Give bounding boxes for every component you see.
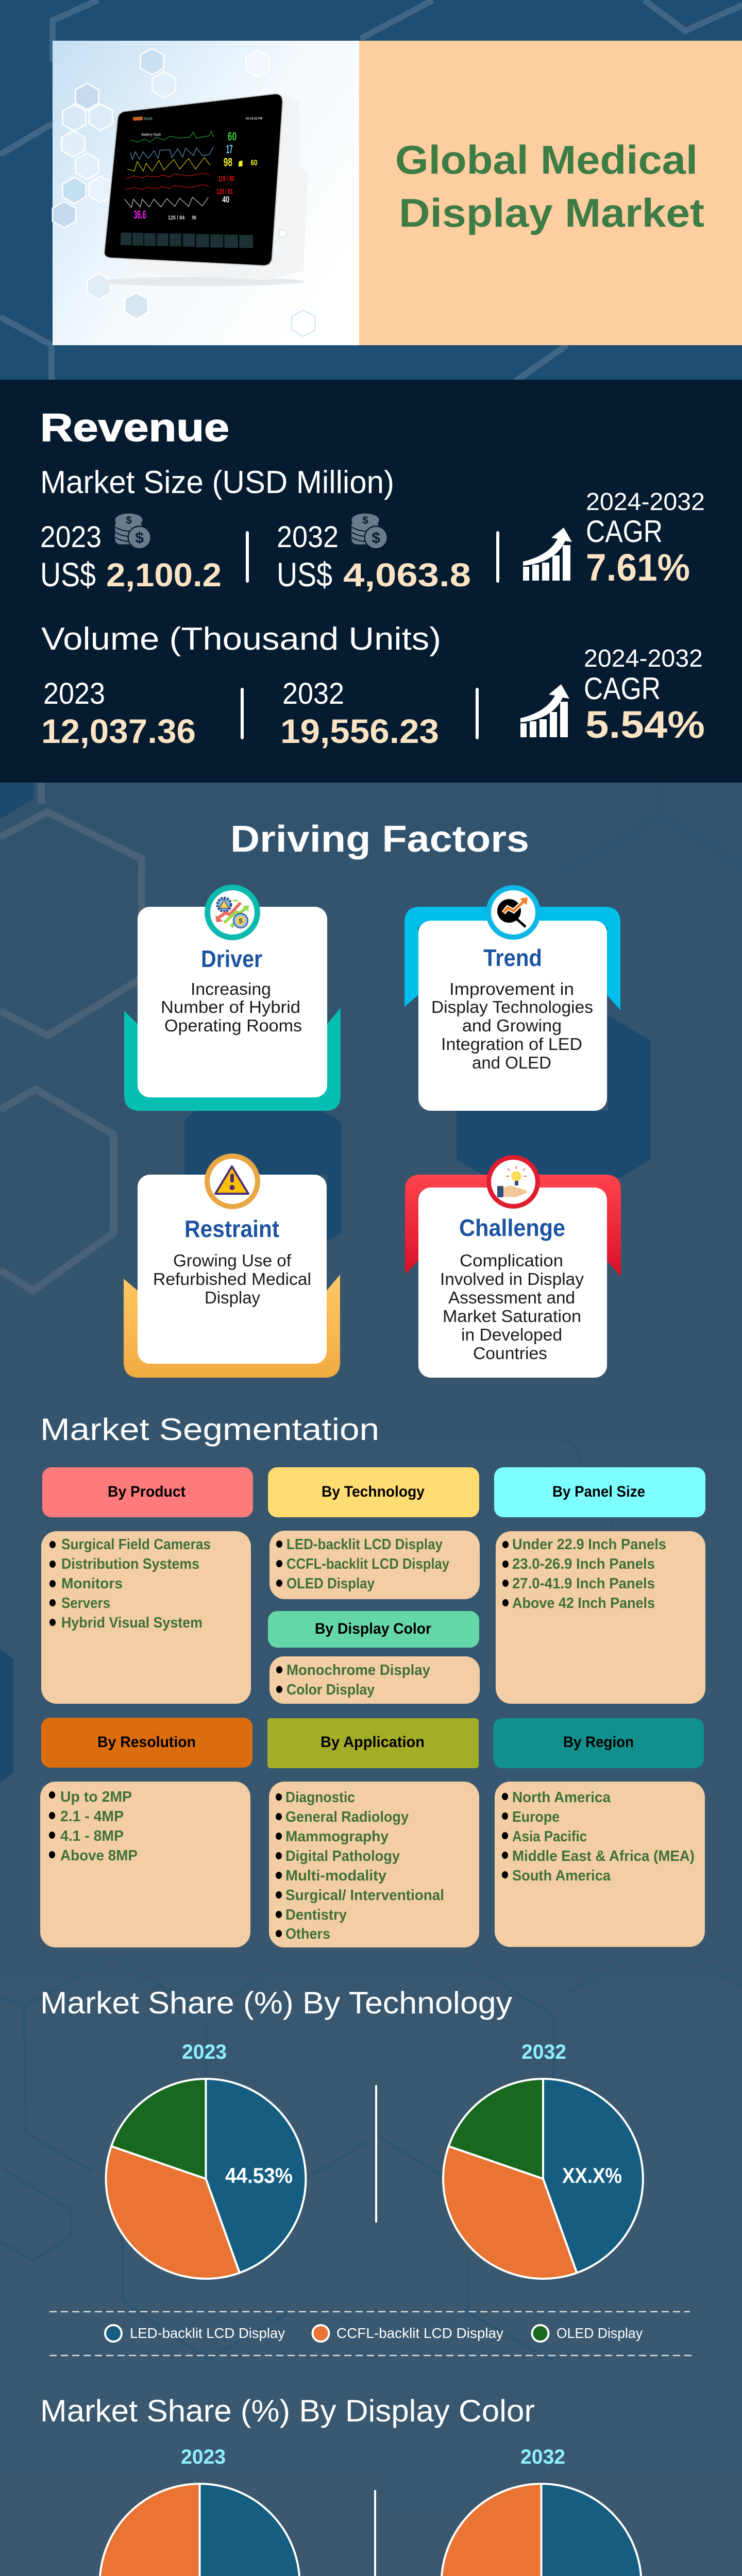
screen readings: 40 — [222, 194, 229, 205]
challenge text: Involved in Display — [440, 1269, 584, 1289]
revenue CAGR — [586, 488, 705, 589]
panel: driver — [124, 885, 341, 1111]
panel: by region — [493, 1718, 705, 1947]
divider — [374, 2490, 376, 2576]
2032 market size: 2032 — [277, 520, 339, 554]
driver text — [161, 979, 302, 1035]
region list: North America — [512, 1789, 611, 1806]
panel: challenge — [405, 1155, 621, 1378]
challenge text: in Developed — [461, 1325, 562, 1344]
resolution list — [49, 1789, 138, 1864]
panel: by technology: By Technology — [322, 1483, 425, 1500]
trend text: and OLED — [472, 1053, 551, 1072]
panel: by technology — [268, 1467, 480, 1599]
panel: by application: By Application — [321, 1734, 425, 1751]
chart: display color 2023: 2023 — [181, 2446, 226, 2468]
restraint text: Growing Use of — [173, 1251, 292, 1270]
region list: Asia Pacific — [512, 1828, 587, 1845]
legend: technology: CCFL-backlit LCD Display — [336, 2325, 503, 2341]
panel: by panel size — [494, 1467, 705, 1704]
divider — [241, 688, 244, 739]
chart: display color 2023 — [100, 2446, 300, 2576]
technology list: CCFL-backlit LCD Display — [286, 1556, 449, 1572]
panel: by resolution — [40, 1718, 252, 1947]
hero panel — [53, 41, 742, 345]
region list: Middle East & Africa (MEA) — [512, 1848, 695, 1865]
region list: Europe — [512, 1809, 560, 1825]
icon: coins 2032 — [351, 514, 387, 549]
trend text: Display Technologies — [431, 997, 593, 1016]
market size heading: Market Size (USD Million) — [40, 465, 394, 500]
application list: General Radiology — [285, 1809, 409, 1825]
icon: coins 2023: $ — [135, 530, 144, 547]
2023 volume: 12,037.36 — [41, 712, 196, 750]
restraint text: Display — [205, 1288, 260, 1307]
2032 volume — [280, 677, 439, 750]
chart: display color 2032 — [442, 2446, 642, 2576]
technology list — [276, 1536, 449, 1592]
trend text: and Growing — [462, 1016, 562, 1035]
revenue panel — [0, 380, 742, 783]
product list: Hybrid Visual System — [61, 1615, 203, 1631]
icon: coins 2032: $ — [372, 530, 380, 547]
panel: by display color — [268, 1611, 480, 1704]
panel: by display color: By Display Color — [315, 1620, 431, 1637]
screen readings — [133, 116, 263, 222]
resolution list: 2.1 - 4MP — [60, 1808, 124, 1825]
screen readings: 119 / 80 — [218, 175, 234, 183]
legend: technology: OLED Display — [556, 2325, 643, 2341]
screen readings: 125 / 84 — [168, 215, 185, 221]
resolution list: 4.1 - 8MP — [60, 1828, 124, 1844]
icon: trend — [486, 885, 541, 940]
display color list: Color Display — [286, 1682, 375, 1698]
application list: Dentistry — [285, 1907, 347, 1923]
icon: driver: $ — [239, 917, 243, 925]
monitor body — [127, 93, 308, 280]
product list: Monitors — [61, 1575, 123, 1592]
volume CAGR: 2024-2032 — [584, 645, 703, 672]
screen readings: S12A — [143, 116, 153, 121]
chart: technology 2032 — [443, 2041, 643, 2279]
region list — [502, 1789, 695, 1884]
icon: driver — [205, 885, 260, 940]
screen readings: 36.6 — [133, 208, 146, 222]
trend title: Trend — [483, 944, 542, 971]
icon: coins 2032: $ — [362, 515, 368, 527]
panel size list: 27.0-41.9 Inch Panels — [512, 1575, 655, 1592]
icon: growth chart — [520, 684, 569, 737]
screen buttons — [121, 233, 253, 248]
revenue CAGR: CAGR — [586, 514, 663, 549]
volume heading: Volume (Thousand Units) — [41, 621, 441, 657]
driver text: Number of Hybrid — [161, 997, 300, 1016]
challenge text: Complication — [460, 1251, 563, 1270]
panel size list: Above 42 Inch Panels — [512, 1595, 655, 1612]
icon: growth chart — [523, 528, 572, 581]
2023 market size: 2,100.2 — [106, 556, 222, 594]
challenge text: Assessment and — [448, 1288, 575, 1307]
market share by display color heading: Market Share (%) By Display Color — [40, 2394, 535, 2428]
divider — [496, 531, 499, 583]
legend: technology: LED-backlit LCD Display — [130, 2325, 285, 2341]
application list — [276, 1789, 444, 1942]
challenge title: Challenge — [459, 1214, 565, 1241]
divider — [375, 2085, 377, 2223]
resolution list: Above 8MP — [60, 1848, 138, 1864]
volume CAGR: 5.54% — [585, 703, 705, 746]
application list: Surgical/ Interventional — [285, 1887, 444, 1904]
title — [395, 137, 704, 235]
icon: restraint — [205, 1154, 260, 1209]
title: Display Market — [399, 190, 704, 235]
application list: Digital Pathology — [285, 1848, 400, 1865]
volume CAGR: CAGR — [584, 671, 661, 706]
product list: Surgical Field Cameras — [61, 1536, 211, 1553]
application list: Multi-modality — [285, 1868, 386, 1884]
screen readings: Battery Fault — [142, 132, 161, 137]
chart: technology 2023: 44.53% — [225, 2163, 293, 2188]
2032 market size — [277, 520, 471, 594]
2023 market size: 2023 — [40, 520, 102, 554]
product list: Servers — [61, 1595, 110, 1612]
product image panel — [53, 41, 359, 345]
title: Global Medical — [395, 137, 698, 182]
screen readings: 03:15:02 PM — [246, 117, 263, 121]
restraint text: Refurbished Medical — [153, 1269, 311, 1289]
revenue heading: Revenue — [40, 406, 229, 450]
technology list: LED-backlit LCD Display — [286, 1536, 443, 1553]
restraint title: Restraint — [184, 1215, 279, 1242]
driving factors heading: Driving Factors — [230, 819, 529, 860]
2032 volume: 19,556.23 — [280, 712, 439, 750]
trend text: Integration of LED — [441, 1035, 582, 1054]
driver title: Driver — [201, 945, 262, 972]
monitor screen — [104, 94, 283, 266]
screen readings: 17 — [226, 143, 233, 156]
chart: technology 2023 — [106, 2041, 306, 2279]
icon: coins 2023 — [115, 514, 151, 549]
trend text: Improvement in — [449, 979, 574, 998]
challenge text — [440, 1251, 584, 1363]
display color list: Monochrome Display — [286, 1662, 430, 1679]
panel: restraint — [124, 1154, 340, 1378]
2023 volume — [41, 677, 196, 750]
legend: technology — [49, 2312, 695, 2355]
panel: by resolution: By Resolution — [97, 1734, 196, 1751]
product list — [49, 1536, 211, 1631]
challenge text: Market Saturation — [443, 1307, 581, 1326]
driver text: Operating Rooms — [164, 1016, 302, 1035]
application list: Others — [285, 1926, 330, 1942]
divider — [476, 688, 479, 739]
panel: by panel size: By Panel Size — [552, 1483, 645, 1500]
panel: by application — [267, 1718, 479, 1947]
chart: display color 2032: 2032 — [520, 2446, 565, 2468]
chart: technology 2032: XX.X% — [562, 2163, 622, 2188]
screen waveforms — [125, 131, 214, 208]
challenge text: Countries — [473, 1344, 547, 1363]
panel: by region: By Region — [563, 1734, 634, 1751]
display color list — [276, 1662, 430, 1698]
application list: Mammography — [285, 1828, 389, 1845]
divider — [246, 531, 249, 583]
screen readings: 98 — [224, 156, 232, 169]
screen readings: 60 — [228, 130, 237, 143]
region list: South America — [512, 1868, 611, 1884]
panel: by product: By Product — [108, 1483, 185, 1500]
title panel — [359, 41, 742, 345]
2032 volume: 2032 — [282, 677, 344, 710]
market share by technology heading: Market Share (%) By Technology — [40, 1986, 512, 2020]
product list: Distribution Systems — [61, 1556, 199, 1572]
screen readings: 120 / 81 — [216, 188, 233, 196]
chart: technology 2023: 2023 — [182, 2041, 227, 2063]
panel size list: 23.0-26.9 Inch Panels — [512, 1556, 655, 1572]
panel: by product — [41, 1467, 253, 1704]
market segmentation heading: Market Segmentation — [40, 1412, 379, 1447]
revenue CAGR: 2024-2032 — [586, 488, 705, 516]
icon: challenge — [486, 1155, 540, 1209]
2023 market size: US$ — [40, 555, 96, 594]
2032 market size: 4,063.8 — [343, 556, 471, 594]
panel size list: Under 22.9 Inch Panels — [512, 1536, 666, 1553]
icon: coins 2023: $ — [126, 515, 132, 527]
panel: trend — [404, 885, 620, 1111]
panel size list — [502, 1536, 666, 1612]
screen readings: 96 — [192, 215, 196, 221]
base shadow — [99, 277, 304, 286]
screen readings: 60 — [251, 159, 258, 167]
revenue CAGR: 7.61% — [586, 546, 690, 589]
trend text — [431, 979, 593, 1072]
decorative hexagons — [53, 48, 269, 319]
resolution list: Up to 2MP — [60, 1789, 132, 1805]
chart: technology 2032: 2032 — [521, 2041, 566, 2063]
driver text: Increasing — [191, 979, 271, 998]
volume CAGR — [584, 645, 705, 746]
2032 market size: US$ — [277, 555, 332, 594]
restraint text — [153, 1251, 311, 1307]
2023 volume: 2023 — [43, 677, 105, 710]
2023 market size — [40, 520, 222, 594]
application list: Diagnostic — [285, 1789, 355, 1806]
technology list: OLED Display — [286, 1575, 375, 1592]
